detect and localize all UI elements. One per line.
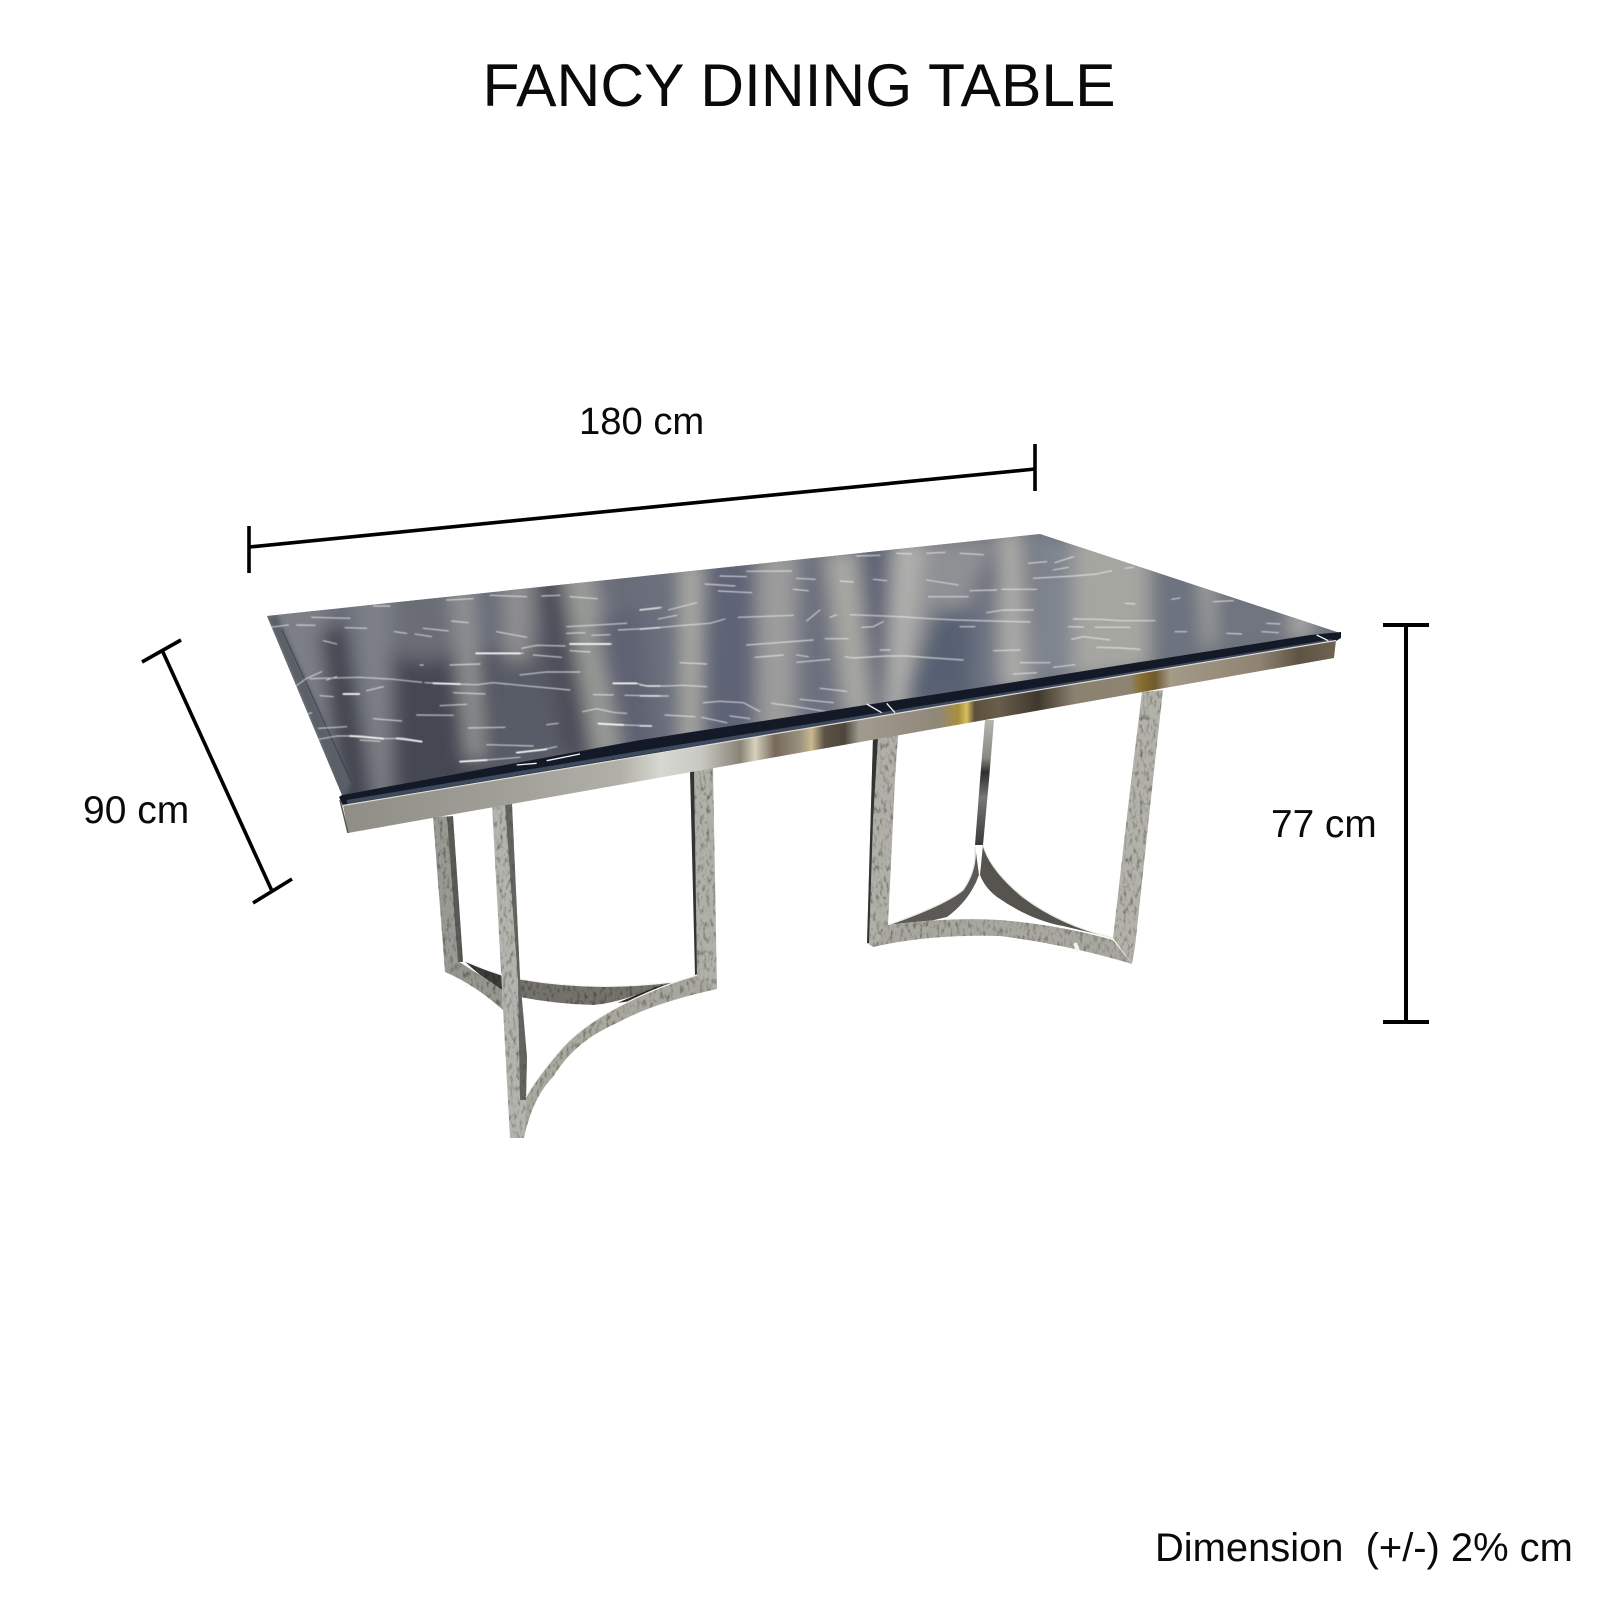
table illustration (267, 530, 1345, 1138)
width arrow (142, 640, 292, 903)
height label: 77 cm (1271, 803, 1377, 846)
length label: 180 cm (579, 400, 704, 443)
reflections on marble (267, 530, 1345, 810)
front bevel (339, 632, 1341, 806)
height arrow (1383, 625, 1429, 1022)
chrome apron rail (340, 640, 1336, 833)
footnote: tolerance: Dimension (+/-) 2% cm (1155, 1526, 1573, 1570)
left leg frame (433, 767, 717, 1138)
right leg frame (867, 690, 1163, 964)
marble veins: left section (270, 595, 660, 762)
left bevel (267, 615, 352, 795)
marble veins: strong strokes left (343, 644, 637, 762)
length arrow (249, 444, 1035, 573)
width label: 90 cm (83, 789, 189, 832)
dimension: width 90 cm (83, 640, 292, 903)
title: FANCY DINING TABLE (482, 51, 1116, 119)
marble veins: centre section (640, 552, 1037, 726)
marble table top (267, 530, 1345, 810)
dimension: length 180 cm (249, 400, 1035, 573)
marble veins: right section (1020, 557, 1280, 676)
